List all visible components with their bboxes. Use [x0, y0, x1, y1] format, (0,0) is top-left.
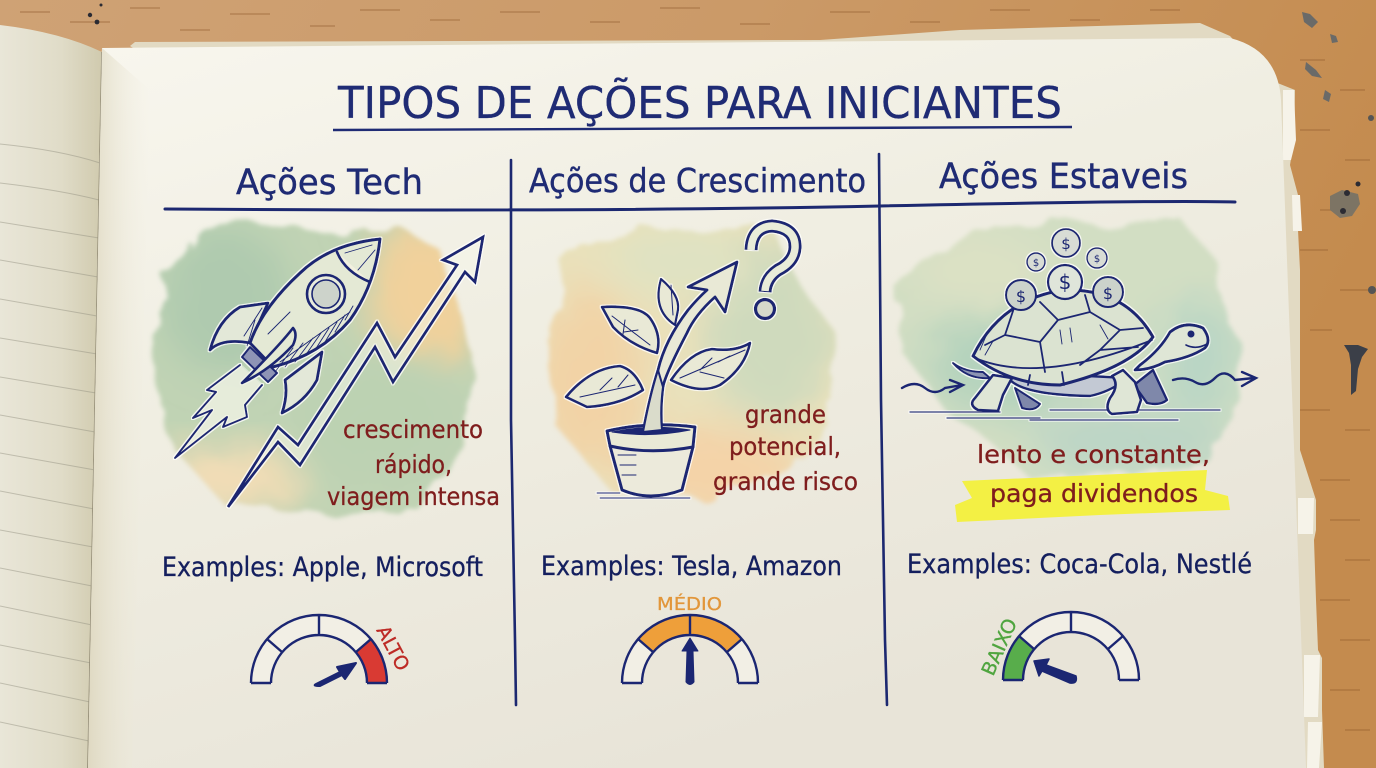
- coin symbols: $: [1033, 258, 1039, 269]
- coin symbols: $: [1103, 284, 1113, 303]
- caption: crescimento rápido, viagem intensa: [327, 415, 500, 511]
- panel: Ações Estaveis: [900, 157, 1256, 683]
- risk gauge: médio: [622, 593, 758, 684]
- examples: Tesla, Amazon: Examples: Tesla, Amazon: [541, 551, 842, 582]
- title: TIPOS DE AÇÕES PARA INICIANTES: [337, 77, 1062, 129]
- risk gauge: baixo: [977, 612, 1139, 683]
- caption: crescimento rápido, viagem intensa: rápido,: [375, 450, 452, 479]
- caption: grande potencial, grande risco: grande risco: [713, 467, 858, 496]
- page gutter shading: [88, 48, 150, 768]
- caption: lento e constante, paga dividendos: paga dividendos: [990, 479, 1198, 508]
- coin symbols: $: [1094, 254, 1100, 265]
- examples: Apple, Microsoft: Examples: Apple, Microsoft: [162, 552, 483, 583]
- heading: Ações Estaveis: Ações Estaveis: [939, 157, 1188, 197]
- label: BAIXO: BAIXO: [977, 615, 1022, 679]
- caption: crescimento rápido, viagem intensa: viagem intensa: [327, 482, 500, 511]
- illustration: turtle with coins: [910, 229, 1220, 420]
- heading: Ações de Crescimento: Ações de Crescimento: [529, 161, 866, 200]
- icon: question mark: [751, 226, 795, 318]
- panel: Ações Tech: [150, 163, 500, 686]
- heading: Ações Tech: Ações Tech: [236, 163, 423, 203]
- illustration: potted plant with growth arrow: [566, 262, 750, 498]
- label: MÉDIO: MÉDIO: [657, 593, 722, 615]
- illustration: rocket: [175, 239, 380, 458]
- label: ALTO: ALTO: [372, 622, 414, 675]
- desk wear marks: [88, 4, 1376, 395]
- coin symbols: $: [1016, 287, 1026, 306]
- watercolor wash: growth: [535, 224, 835, 515]
- arrow: wavy right: [1173, 372, 1256, 386]
- arrow: wavy left: [902, 380, 963, 392]
- illustration: rising zigzag arrow: [228, 237, 483, 507]
- coin symbols: [1016, 235, 1113, 306]
- panel: Ações de Crescimento: [529, 161, 866, 684]
- risk gauge: alto: [251, 615, 414, 686]
- coin symbols: $: [1059, 270, 1071, 294]
- caption: grande potencial, grande risco: potencial,: [729, 432, 841, 461]
- caption: grande potencial, grande risco: grande: [745, 400, 826, 429]
- caption: crescimento rápido, viagem intensa: crescimento: [343, 415, 483, 444]
- caption: lento e constante, paga dividendos: [977, 440, 1210, 508]
- caption: grande potencial, grande risco: [713, 400, 858, 496]
- watercolor wash: stable: [900, 218, 1240, 478]
- examples: Coca-Cola, Nestlé: Examples: Coca-Cola, Nestlé: [907, 549, 1252, 580]
- caption: lento e constante, paga dividendos: lento e constante,: [977, 440, 1210, 469]
- yellow highlight: [955, 470, 1230, 522]
- watercolor wash: tech: [150, 215, 485, 515]
- column rules: [165, 154, 1235, 705]
- coin symbols: $: [1061, 235, 1071, 253]
- left notebook page: [0, 25, 102, 768]
